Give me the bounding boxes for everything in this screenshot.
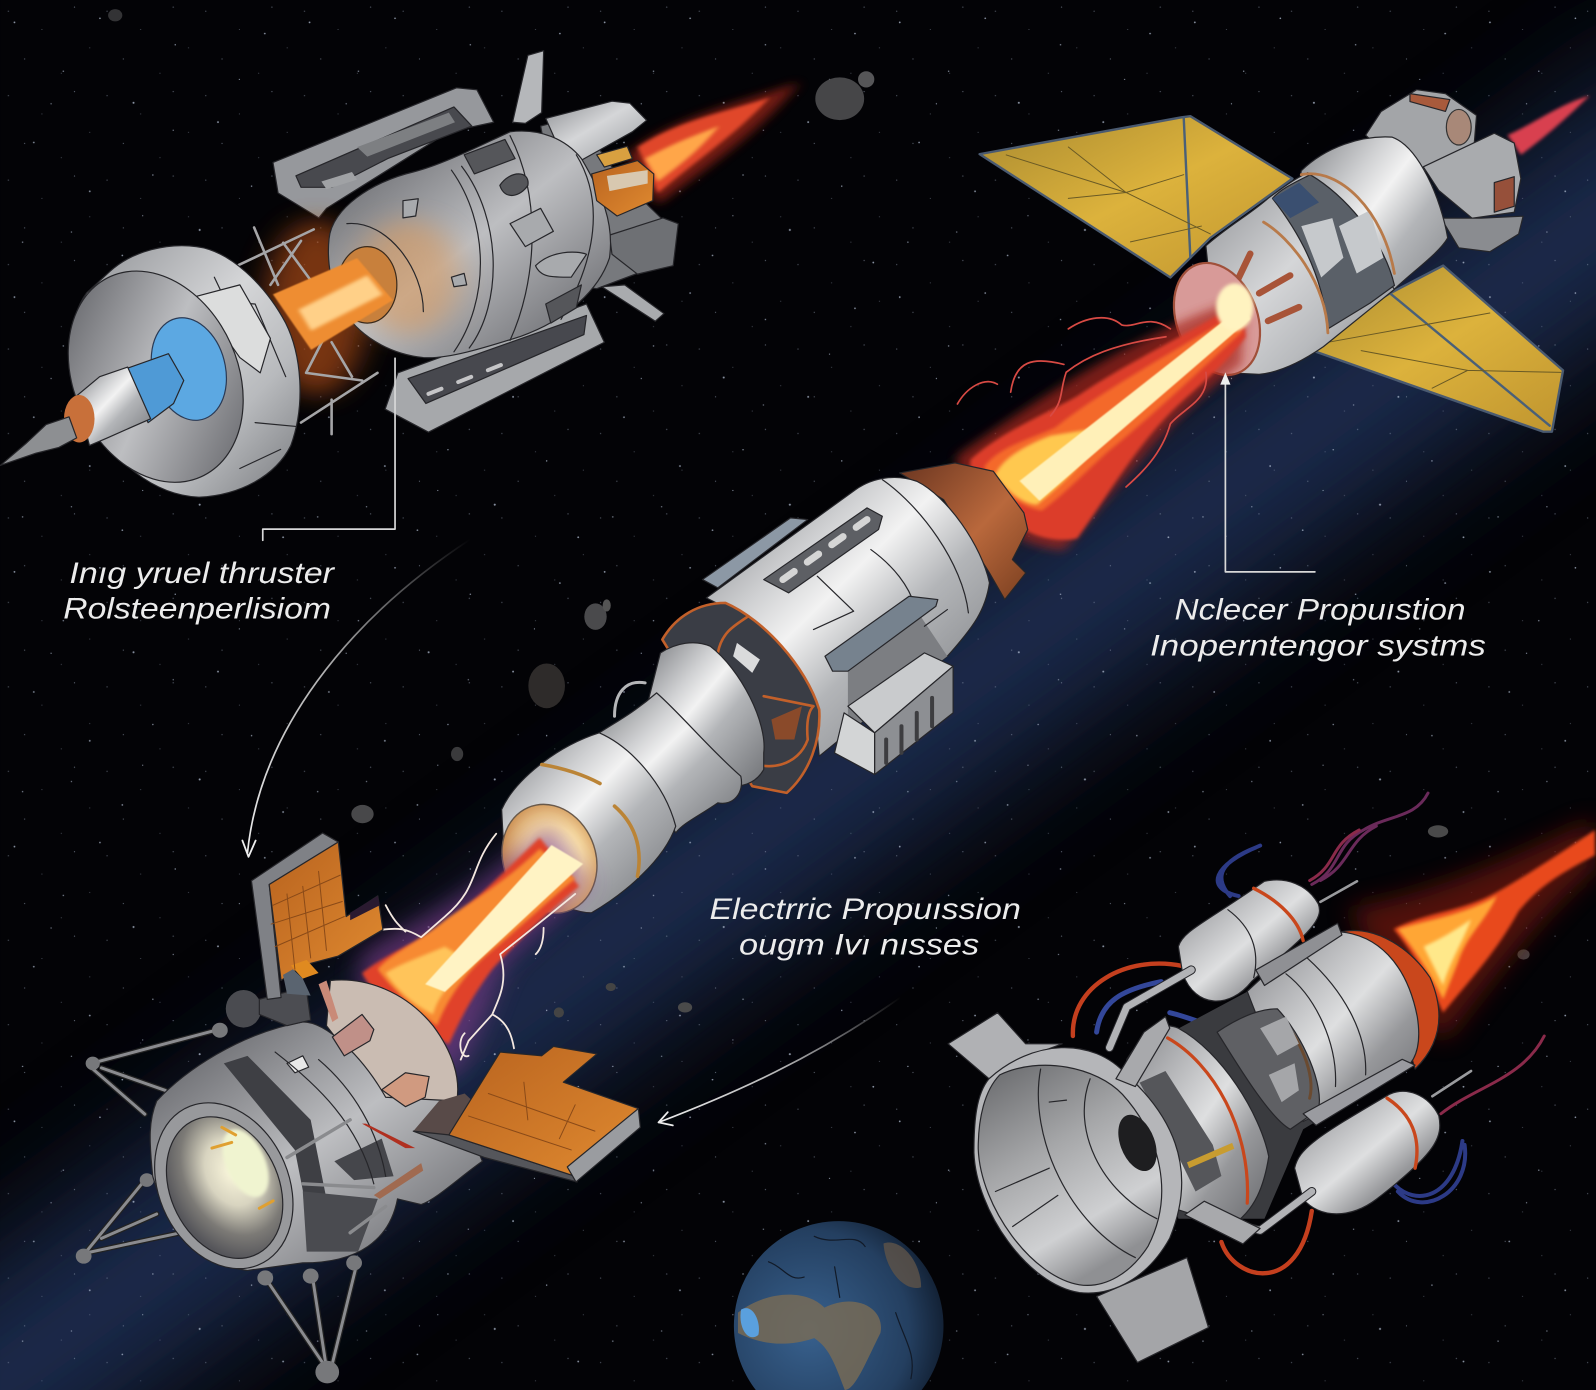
plume: nuclear beam: [957, 283, 1253, 550]
hull glow: [357, 220, 459, 335]
side panels: [703, 508, 938, 671]
hull details: [403, 199, 586, 287]
plume: electric propulsion: [359, 822, 591, 1078]
label: nuclear propulsion: [1150, 594, 1486, 662]
copper rear nozzle: [900, 463, 1028, 600]
ship 5: chemical engine: [948, 793, 1595, 1363]
copper fins: [1237, 254, 1299, 321]
leader line: ring fuel thruster: [263, 358, 395, 540]
coast lines: [768, 1236, 912, 1379]
lightning arcs: [382, 834, 575, 1060]
hull seams: [347, 136, 593, 352]
ship 1: ring fuel thruster: [0, 51, 800, 497]
reactor glow: [213, 1123, 278, 1203]
bell nozzle: [974, 1048, 1182, 1293]
wires: [1073, 793, 1544, 1273]
leg joints: [76, 1023, 362, 1383]
label: electric propulsion: [709, 893, 1021, 961]
bottom tank: [1295, 1059, 1471, 1214]
orange heat glow: [265, 220, 367, 396]
struts: [287, 1120, 386, 1233]
thruster disc: [0, 246, 300, 497]
engine flame: [1351, 818, 1595, 1040]
lower gold wing: [1301, 266, 1563, 432]
main rear body: [1247, 932, 1419, 1122]
ship 4: electric propulsion craft: [76, 833, 640, 1383]
electric arcs: [957, 318, 1206, 487]
label: ring fuel thruster: [63, 557, 335, 626]
open frame section: [1272, 175, 1394, 329]
plasma beam: [273, 247, 397, 350]
asteroids: [108, 9, 1530, 1018]
body cylinder: [706, 477, 989, 756]
copper blocks: [332, 1014, 429, 1199]
dark mid section: [1217, 1009, 1319, 1129]
front ring: [130, 1083, 318, 1289]
collar disc: [645, 643, 764, 786]
nozzle cone: [125, 354, 184, 423]
tan rear dome: [326, 980, 458, 1112]
equipment box: [835, 653, 953, 775]
forward section: [1127, 1026, 1269, 1226]
label: nuclear propulsion: Inoperntengor systms: [1150, 629, 1486, 662]
label: ring fuel thruster: Rolsteenperlisiom: [63, 593, 331, 626]
red rim nozzle: [1338, 931, 1439, 1069]
arrow: curved to electric craft: [242, 539, 470, 857]
disc seams: [196, 277, 296, 469]
planet earth: [734, 1221, 944, 1390]
main hull: [328, 131, 611, 358]
bottom panel: [385, 304, 604, 432]
feed pipes: [1109, 970, 1312, 1244]
upper orange panel: [251, 833, 383, 1026]
central spacecraft: [491, 463, 1028, 921]
rear ball joint: [226, 990, 261, 1028]
lattice legs: [82, 1030, 356, 1368]
bell seams: [995, 1069, 1157, 1258]
rear housing: [541, 117, 663, 289]
ship 2: nuclear propulsion: [957, 90, 1590, 550]
copper frame ring: [662, 603, 819, 793]
top panel: [273, 88, 494, 218]
dark segments: [224, 1056, 326, 1210]
lower orange panel: [413, 1046, 640, 1182]
blue core: [143, 314, 235, 424]
upper gold wing: [980, 116, 1292, 277]
exhaust flame: [627, 82, 800, 205]
label: ring fuel thruster: Inıg yruel thruster: [69, 557, 335, 590]
lower body: [599, 693, 742, 833]
leader line: nuclear propulsion: [1220, 372, 1315, 572]
rear flame: [1508, 96, 1590, 155]
orange box: [592, 146, 654, 216]
dark engine backing: [1135, 989, 1394, 1219]
main body: [150, 1022, 482, 1270]
rear pods: [546, 101, 678, 321]
handle: [615, 682, 645, 716]
label: electric propulsion: ougm Ivı nısses: [739, 928, 979, 961]
fins: [948, 1013, 1208, 1363]
truss struts: [239, 227, 377, 434]
fin: [513, 51, 544, 123]
arrow: pointer to orange panel: [659, 997, 901, 1125]
continents: [738, 1295, 881, 1390]
nozzle housing: [1206, 173, 1394, 374]
main hull: [1160, 137, 1448, 384]
top tank: [1178, 880, 1357, 1001]
rear pods: [1366, 90, 1523, 252]
label: electric propulsion: Electrric Propuıssion: [709, 893, 1021, 926]
disc opening: [44, 259, 268, 495]
nozzle section: [491, 733, 676, 921]
label: nuclear propulsion: Nclecer Propuıstion: [1175, 594, 1466, 627]
